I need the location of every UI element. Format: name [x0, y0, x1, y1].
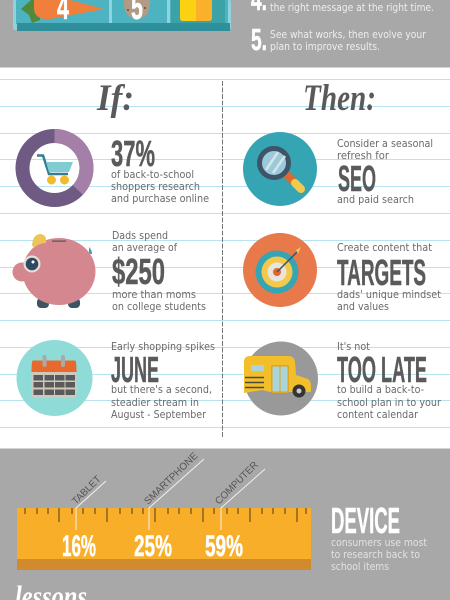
- step 5: [251, 22, 427, 57]
- text: JUNE: Early shopping spikes: [111, 341, 215, 353]
- chart: ruler device share: [17, 450, 311, 570]
- text: DEVICE: [331, 500, 427, 573]
- text: TARGETS: Create content that: [337, 242, 432, 254]
- text: SEO: and paid search: [337, 194, 414, 206]
- text: JUNE: but there's a second,: [111, 384, 212, 396]
- heading: If: If:: [96, 78, 134, 119]
- icon: magnifying glass: [243, 132, 317, 206]
- text: TARGETS: and values: [337, 301, 389, 313]
- tablet callout: 16%: [62, 530, 96, 563]
- step 5: See what works, then evolve your: [270, 29, 427, 41]
- text: TOO LATE: content calendar: [337, 409, 419, 421]
- text: TARGETS: dads' unique mindset: [337, 289, 441, 301]
- stat: 37%: 37%: [111, 133, 155, 174]
- heading: Then: Then:: [303, 78, 376, 119]
- text: TOO LATE: [337, 341, 442, 421]
- icon: school bus: [244, 342, 318, 416]
- text: TOO LATE: It's not: [337, 341, 370, 353]
- icon: donut chart with shopping cart: [22, 136, 86, 200]
- text: JUNE: JUNE: [111, 349, 159, 390]
- text: TOO LATE: school plan in to your: [337, 397, 442, 409]
- stat: 37%: [111, 133, 209, 205]
- text: JUNE: steadier stream in: [111, 397, 199, 409]
- icon: calendar: [16, 340, 92, 416]
- computer callout: [205, 460, 265, 563]
- text: $250: Dads spend: [112, 230, 168, 242]
- computer callout: 59%: [205, 530, 243, 563]
- text: SEO: SEO: [338, 158, 376, 199]
- icon: cookie: [124, 0, 150, 19]
- step 5: 5.: [251, 22, 267, 57]
- text: DEVICE: consumers use most: [331, 537, 427, 549]
- text: $250: more than moms: [112, 289, 196, 301]
- panel: top steps band: [0, 0, 450, 68]
- computer callout: COMPUTER: [213, 460, 261, 507]
- icon: juice box: [180, 0, 212, 21]
- text: TARGETS: [337, 242, 441, 313]
- text: SEO: [337, 138, 433, 206]
- text: $250: [112, 230, 206, 313]
- stat: 37%: shoppers research: [111, 181, 200, 193]
- text: JUNE: [111, 341, 215, 421]
- smartphone callout: [134, 450, 204, 563]
- step 5: plan to improve results.: [270, 41, 380, 53]
- text: $250: an average of: [112, 242, 177, 254]
- stat: 37%: of back-to-school: [111, 169, 194, 181]
- icon: target: [243, 233, 317, 307]
- text: TOO LATE: to build a back-to-: [337, 384, 424, 396]
- text: $250: on college students: [112, 301, 206, 313]
- smartphone callout: 25%: [134, 530, 172, 563]
- icon: piggy bank: [12, 234, 96, 308]
- panel: device band: [0, 448, 450, 600]
- tablet callout: TABLET: [70, 474, 104, 507]
- icon: cart: [37, 156, 73, 184]
- text: DEVICE: school items: [331, 561, 389, 573]
- tablet callout: [62, 474, 106, 563]
- text: DEVICE: to research back to: [331, 549, 420, 561]
- text: SEO: Consider a seasonal: [337, 138, 433, 150]
- smartphone callout: SMARTPHONE: [142, 450, 201, 507]
- panel: notebook if/then: [0, 68, 450, 448]
- icon: lunch tray: [13, 0, 231, 31]
- text: SEO: refresh for: [337, 150, 390, 162]
- text: JUNE: August - September: [111, 409, 207, 421]
- text: $250: $250: [112, 251, 165, 292]
- icon: carrot: [21, 0, 104, 23]
- stat: 37%: and purchase online: [111, 193, 209, 205]
- step 4: [251, 0, 434, 17]
